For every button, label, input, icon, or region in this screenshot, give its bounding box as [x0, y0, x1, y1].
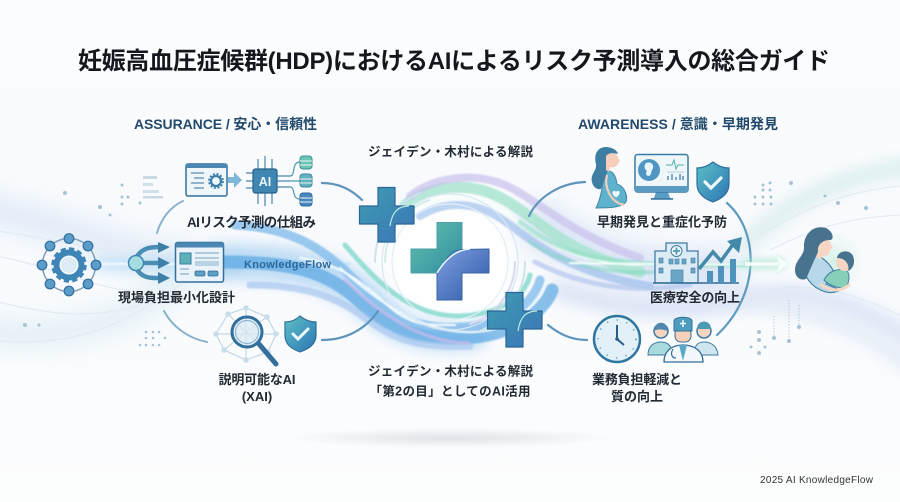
icon: plus center — [411, 222, 489, 300]
icon: shield right — [697, 162, 729, 202]
heading: awareness: AWARENESS / 意識・早期発見 — [578, 116, 778, 132]
icon: plus right — [488, 292, 542, 347]
label: commentary top: ジェイデン・木村による解説 — [368, 144, 533, 159]
icon: gear network — [37, 234, 101, 296]
connector arcs — [157, 182, 751, 342]
icon: ultrasound monitor — [635, 154, 688, 200]
AI window — [186, 164, 227, 196]
label: workload reduction: 質の向上 — [611, 389, 663, 404]
label: early detection: 早期発見と重症化予防 — [597, 214, 727, 230]
footer credit: 2025 AI KnowledgeFlow — [760, 475, 874, 486]
label: commentary bottom — [368, 364, 533, 398]
icon: AI pipeline — [186, 156, 312, 206]
background data dots — [23, 176, 868, 355]
icon: workflow window — [176, 242, 224, 282]
icon: explainable AI magnifier — [213, 305, 279, 364]
icon: clock — [594, 316, 640, 362]
label: KnowledgeFlow: KnowledgeFlow — [244, 259, 331, 271]
icon: shield left — [285, 316, 316, 352]
label: medical safety: 医療安全の向上 — [650, 290, 740, 305]
floor shadow — [285, 428, 615, 448]
arrow to chip — [228, 172, 242, 188]
label: workload reduction — [592, 372, 682, 404]
label: explainable AI: (XAI) — [242, 389, 272, 404]
central swirl — [225, 178, 745, 346]
AI chip: AI — [259, 175, 271, 189]
label: AI risk mechanism: AIリスク予測の仕組み — [187, 214, 316, 230]
arrow to mother — [742, 255, 790, 274]
icon: hospital with growth chart — [653, 237, 742, 283]
label: workload reduction: 業務負担軽減と — [592, 372, 682, 387]
label: commentary bottom: 「第2の目」としてのAI活用 — [370, 384, 530, 398]
label: explainable AI: 説明可能なAI — [218, 372, 296, 387]
label: commentary bottom: ジェイデン・木村による解説 — [368, 364, 533, 378]
label: explainable AI — [218, 372, 296, 404]
icon: mother and baby — [795, 227, 862, 292]
title: 妊娠高血圧症候群(HDP)におけるAIによるリスク予測導入の総合ガイド — [78, 48, 830, 75]
label: workload minimization: 現場負担最小化設計 — [118, 290, 235, 305]
databases — [300, 156, 312, 206]
icon: medical staff — [648, 317, 718, 362]
heading: assurance: ASSURANCE / 安心・信頼性 — [134, 116, 317, 132]
icon: pregnant woman — [592, 147, 627, 208]
background flow ribbons — [0, 165, 900, 375]
icon: branching arrows — [128, 242, 170, 284]
icon: plus left — [360, 188, 414, 242]
